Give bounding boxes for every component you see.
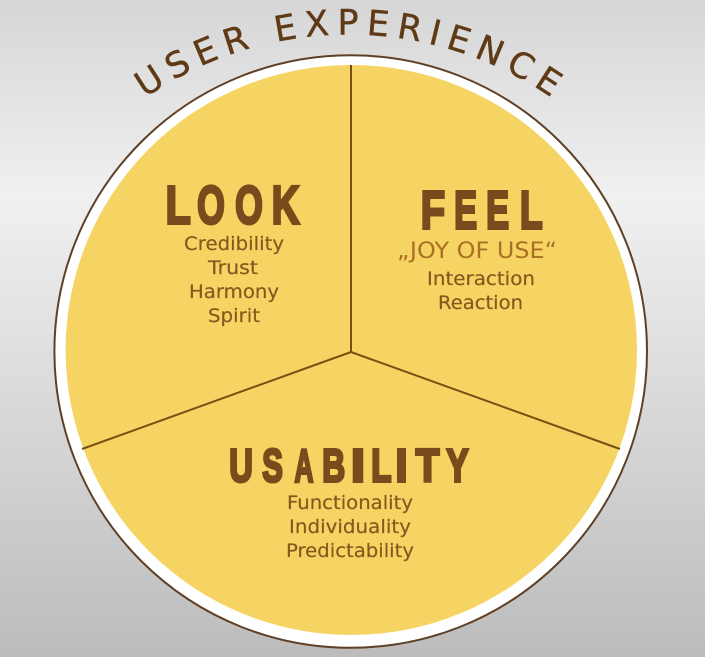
heading: usability: I bbox=[396, 440, 408, 492]
heading: look: L bbox=[166, 176, 191, 236]
heading: look: K bbox=[272, 176, 300, 236]
usability items: Predictability bbox=[286, 540, 414, 562]
usability items bbox=[286, 492, 414, 562]
usability items: Functionality bbox=[287, 492, 413, 514]
feel items bbox=[427, 268, 535, 314]
segment dividers bbox=[82, 65, 620, 449]
heading: feel bbox=[421, 180, 543, 240]
heading: usability: S bbox=[262, 440, 283, 492]
heading: feel: E bbox=[454, 180, 477, 240]
look items: Harmony bbox=[189, 281, 279, 303]
heading: usability bbox=[229, 440, 468, 492]
heading: usability: U bbox=[229, 440, 253, 492]
look items: Credibility bbox=[184, 233, 284, 255]
heading: usability: B bbox=[322, 440, 345, 492]
heading: usability: A bbox=[294, 440, 313, 492]
look items: Spirit bbox=[208, 305, 260, 327]
heading: look: O bbox=[235, 176, 263, 236]
look items bbox=[184, 233, 284, 327]
look items: Trust bbox=[207, 257, 258, 279]
heading: usability: L bbox=[371, 440, 391, 492]
heading: feel: L bbox=[520, 180, 543, 240]
heading: usability: Y bbox=[446, 440, 468, 492]
heading: look: O bbox=[197, 176, 225, 236]
heading: feel: F bbox=[421, 180, 445, 240]
panel: look bbox=[166, 176, 300, 327]
feel items: Reaction bbox=[438, 292, 523, 314]
panel: feel bbox=[397, 180, 557, 314]
heading: look bbox=[166, 176, 300, 236]
feel items: Interaction bbox=[427, 268, 535, 290]
heading: usability: I bbox=[351, 440, 365, 492]
heading: usability: T bbox=[416, 440, 439, 492]
outer ring bbox=[54, 55, 647, 648]
panel: usability bbox=[229, 440, 468, 562]
joy of use subtitle: „JOY OF USE“ bbox=[397, 238, 557, 264]
usability items: Individuality bbox=[289, 516, 411, 538]
heading: feel: E bbox=[486, 180, 509, 240]
yellow disc bbox=[66, 65, 637, 635]
diagram circle bbox=[54, 55, 647, 648]
curved title: USER EXPERIENCE bbox=[134, 8, 564, 96]
